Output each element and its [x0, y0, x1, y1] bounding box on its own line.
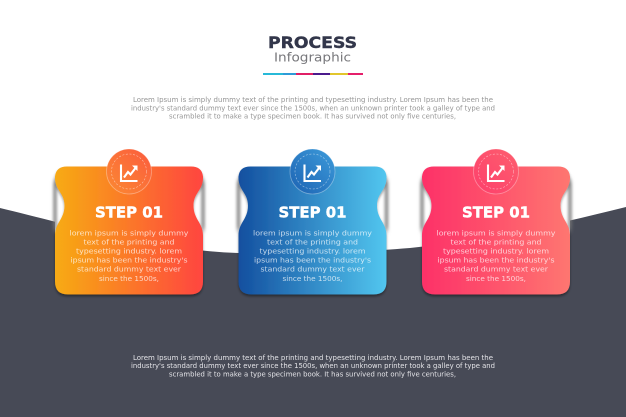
notch backing and side shadows	[237, 174, 388, 234]
step description: standard dummy text ever	[260, 264, 366, 274]
step description: typesetting industry. lorem	[260, 246, 366, 256]
step description: lorem ipsum is simply dummy	[70, 228, 189, 238]
step description: text of the printing and	[450, 238, 542, 246]
step description: typesetting industry. lorem	[443, 246, 549, 256]
step description: standard dummy text ever	[77, 264, 182, 274]
step description: ipsum has been the industry's	[438, 256, 555, 264]
step heading: STEP 01	[462, 204, 530, 222]
step description: standard dummy text ever	[444, 264, 549, 274]
step description: since the 1500s,	[466, 274, 526, 283]
footer text block	[131, 354, 495, 378]
icon: growth chart badge	[290, 149, 335, 194]
notch backing and side shadows	[54, 174, 204, 234]
step description: since the 1500s,	[282, 274, 342, 283]
step description: lorem ipsum is simply dummy	[253, 228, 373, 238]
step description: ipsum has been the industry's	[254, 256, 371, 264]
intro text block: Lorem Ipsum is simply dummy text of the printing and typesetting industry. Lorem Ipsum has been the	[133, 96, 493, 104]
footer text block: scrambled it to make a type specimen book. It has survived not only five centuries,	[169, 370, 456, 378]
panel: step card orange	[54, 149, 204, 294]
step description: typesetting industry. lorem	[76, 246, 182, 256]
intro text block: scrambled it to make a type specimen book. It has survived not only five centuries,	[169, 113, 456, 121]
intro text block: industry's standard dummy text ever since the 1500s, when an unknown printer took a galley of type and	[131, 104, 495, 112]
step description: ipsum has been the industry's	[70, 256, 188, 264]
step description: lorem ipsum is simply dummy	[436, 228, 556, 238]
intro text block	[131, 96, 495, 121]
footer text block: industry's standard dummy text ever since the 1500s, when an unknown printer took a galley of type and	[131, 362, 495, 370]
step heading: STEP 01	[278, 204, 346, 222]
dark background wave	[0, 207, 626, 417]
footer text block: Lorem Ipsum is simply dummy text of the printing and typesetting industry. Lorem Ipsum has been the	[133, 354, 493, 362]
card body	[238, 166, 387, 294]
card body	[422, 166, 570, 294]
step description	[253, 228, 373, 283]
title: PROCESS	[268, 33, 357, 52]
panel: step card blue	[237, 149, 388, 294]
card body	[55, 166, 203, 294]
icon: growth chart badge	[474, 149, 518, 194]
step heading: STEP 01	[95, 204, 163, 222]
step description: text of the printing and	[84, 238, 175, 246]
icon: growth chart badge	[106, 149, 152, 194]
step description: since the 1500s,	[99, 274, 159, 283]
panel: step card pink	[420, 149, 572, 294]
colored divider line	[263, 73, 363, 75]
step description: text of the printing and	[267, 238, 358, 246]
step description	[436, 228, 556, 283]
notch backing and side shadows	[420, 174, 572, 234]
subtitle: Infographic	[274, 50, 351, 64]
step description	[70, 228, 189, 283]
